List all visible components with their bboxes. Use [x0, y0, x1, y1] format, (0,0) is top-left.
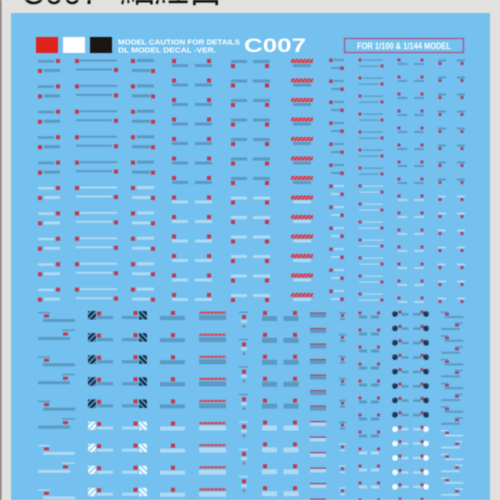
- lower column f: [242, 312, 246, 500]
- scale label box: [344, 38, 464, 52]
- colour swatches: [36, 37, 112, 53]
- lower column o: [444, 312, 459, 500]
- lower column i: [310, 312, 326, 500]
- decal columns D and E: [174, 59, 209, 310]
- decal column B: [77, 59, 116, 312]
- heading: model caution: MODEL CAUTION FOR DETAILS: [118, 40, 240, 46]
- decal column A: [40, 59, 58, 312]
- scale label box: FOR 1/100 & 1/144 MODEL: [357, 41, 451, 51]
- lower column a: caution labels: [44, 312, 68, 500]
- decal column C: [133, 59, 153, 312]
- lower column m: hatch circles: [395, 310, 405, 500]
- lower column e: red hatch bars: [199, 312, 226, 500]
- heading: code C007: C007: [244, 35, 306, 57]
- heading: model caution: [118, 40, 240, 54]
- heading: model caution: DL MODEL DECAL -VER.: [118, 48, 216, 54]
- decal columns F and G: [233, 60, 267, 305]
- decal columns M and N: [440, 60, 462, 303]
- decal column J: [360, 58, 382, 305]
- lower column c: hatch squares: [130, 311, 143, 500]
- lower column n: hatch circles: [417, 310, 426, 500]
- decal columns K and L: [399, 58, 422, 303]
- decal column I: [331, 58, 342, 305]
- lower column b: hatch squares: [92, 311, 105, 500]
- decal column H: red hatch bars: [291, 59, 313, 303]
- lower columns k and l: [360, 312, 378, 500]
- lower column j: [341, 312, 344, 500]
- lower columns g and h: [265, 311, 295, 500]
- lower column d: [170, 311, 175, 500]
